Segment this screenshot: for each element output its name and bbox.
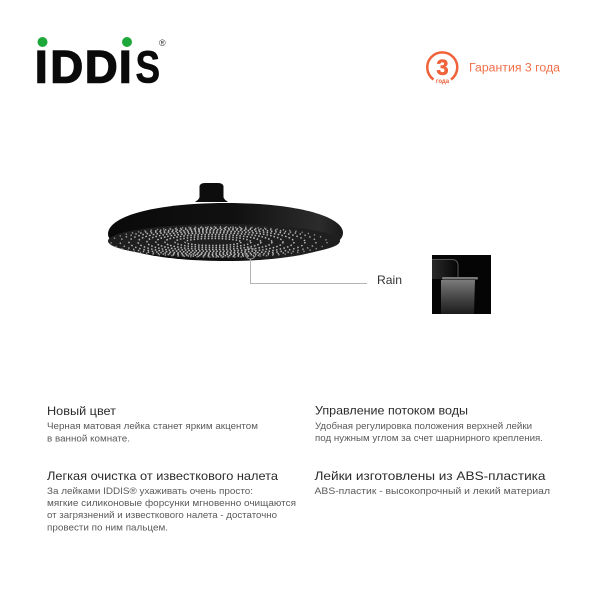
logo green dot left xyxy=(38,37,48,47)
shower head product image xyxy=(108,183,343,261)
logo green dot right xyxy=(122,37,132,47)
logo: IDDIS xyxy=(35,37,166,92)
heading: Новый цвет xyxy=(47,404,117,418)
body text xyxy=(315,421,543,443)
body text: мягкие силиконовые форсунки мгновенно очищаются xyxy=(47,498,296,508)
callout marker ring xyxy=(245,248,256,259)
body text: от загрязнений и известкового налета - достаточно xyxy=(47,510,277,520)
thumbnail shower arm xyxy=(432,260,458,277)
warranty years label: года xyxy=(436,79,450,85)
shower nozzles xyxy=(111,227,327,257)
text block: easy cleaning xyxy=(47,469,296,532)
warranty badge xyxy=(427,52,561,85)
body text: в ванной комнате. xyxy=(47,434,130,444)
text block: new colour xyxy=(47,404,258,444)
thumbnail wall xyxy=(432,259,456,279)
body text: ABS-пластик - высокопрочный и лекий материал xyxy=(314,486,550,496)
callout leader line xyxy=(245,248,367,284)
thumbnail background xyxy=(432,255,491,314)
text block: flow control xyxy=(315,404,543,443)
body text: провести по ним пальцем. xyxy=(47,522,168,532)
warranty number: 3 xyxy=(436,55,449,80)
heading: Лейки изготовлены из ABS-пластика xyxy=(314,469,546,483)
logo wordmark: S xyxy=(136,42,160,92)
shower mount stem xyxy=(195,183,228,202)
shower head body xyxy=(108,203,343,261)
body text xyxy=(47,486,296,532)
logo registered mark: ® xyxy=(159,38,166,48)
callout line xyxy=(250,259,367,284)
heading: Легкая очистка от известкового налета xyxy=(47,469,278,483)
body text xyxy=(47,421,258,444)
shower head nozzle face xyxy=(108,224,340,258)
callout label: Rain: Rain xyxy=(377,273,402,287)
body text: Удобная регулировка положения верхней лейки xyxy=(315,421,532,431)
body text: Черная матовая лейка станет ярким акцентом xyxy=(47,421,258,431)
body text: За лейками IDDIS® ухаживать очень просто: xyxy=(47,486,253,496)
body text: под нужным углом за счет шарнирного крепления. xyxy=(315,433,543,443)
text block: ABS plastic xyxy=(314,469,550,496)
thumbnail: rain shower photo xyxy=(432,255,491,314)
warranty text: Гарантия 3 года xyxy=(469,62,561,74)
thumbnail water xyxy=(441,280,475,314)
heading: Управление потоком воды xyxy=(315,404,468,418)
thumbnail shower head xyxy=(442,277,478,280)
logo wordmark: IDDI xyxy=(35,42,132,92)
warranty ring icon xyxy=(427,52,457,80)
